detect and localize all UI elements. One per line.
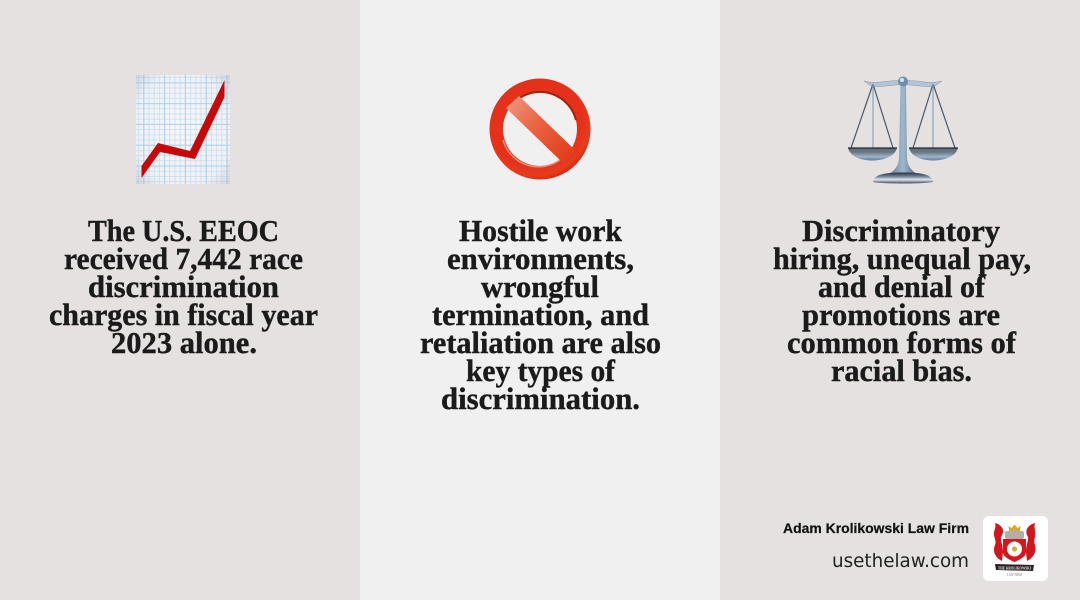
logo: law firm crest: LAW FIRM: [1007, 573, 1022, 577]
icon: balance scale: [848, 76, 958, 184]
panel: types of discrimination: [360, 0, 720, 600]
text: discriminatory practices: promotions are: [802, 298, 1000, 332]
text: hostile work environments: key types of: [466, 354, 616, 388]
panel: forms of racial bias: [720, 0, 1080, 600]
text: discriminatory practices: [773, 214, 1031, 388]
panel: EEOC charges: [0, 0, 360, 600]
text: hostile work environments: environments,: [447, 242, 634, 276]
footer: website: usethelaw.com: [832, 550, 969, 572]
text: discriminatory practices: and denial of: [818, 270, 986, 304]
text: EEOC statistic: charges in fiscal year: [49, 298, 318, 332]
icon: chart with upward trend: [136, 75, 230, 184]
text: EEOC statistic: The U.S. EEOC: [88, 214, 279, 248]
text: EEOC statistic: received 7,442 race: [64, 242, 303, 276]
text: EEOC statistic: 2023 alone.: [111, 326, 257, 360]
logo: law firm crest: THE KROLIKOWSKI: [998, 565, 1031, 570]
text: hostile work environments: wrongful: [481, 270, 599, 304]
text: hostile work environments: discrimination.: [441, 382, 640, 416]
text: EEOC statistic: [49, 214, 318, 360]
text: hostile work environments: retaliation are also: [420, 326, 661, 360]
icon: prohibited sign: [490, 78, 590, 180]
text: discriminatory practices: racial bias.: [831, 354, 972, 388]
text: hostile work environments: [420, 214, 661, 416]
logo: law firm crest: [983, 516, 1048, 581]
text: discriminatory practices: hiring, unequal pay,: [773, 242, 1031, 276]
text: hostile work environments: Hostile work: [459, 214, 622, 248]
footer: firm name: Adam Krolikowski Law Firm: [783, 521, 969, 536]
text: discriminatory practices: common forms of: [787, 326, 1017, 360]
text: discriminatory practices: Discriminatory: [802, 214, 1000, 248]
text: EEOC statistic: discrimination: [88, 270, 279, 304]
text: hostile work environments: termination, and: [432, 298, 649, 332]
